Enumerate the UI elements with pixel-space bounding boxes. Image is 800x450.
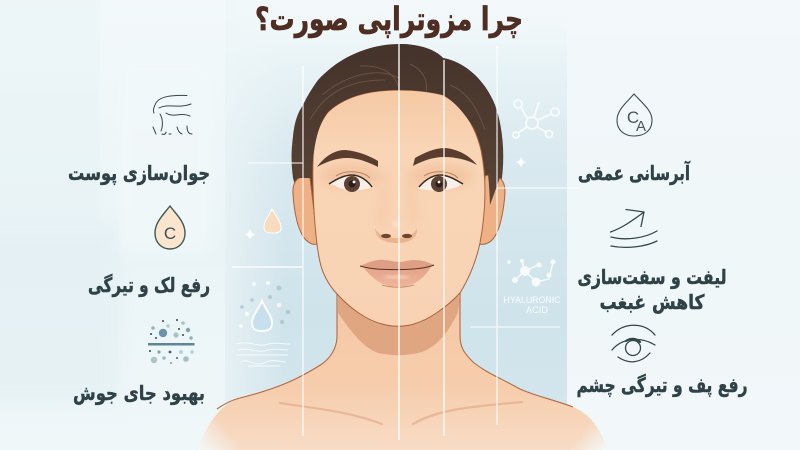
eye socket shading	[320, 164, 472, 225]
wavy lines	[236, 343, 290, 366]
item: lifting and firming	[578, 210, 726, 314]
label: آبرسانی عمقی	[578, 160, 691, 185]
label: جوان‌سازی پوست	[68, 161, 210, 186]
hyaluronic acid text	[504, 295, 561, 316]
shoulder fades	[198, 398, 240, 450]
molecule top	[513, 100, 559, 138]
label line 1: لیفت و سفت‌سازی	[578, 265, 726, 289]
figure: shoulders and neck	[198, 293, 608, 450]
hyaluronic acid text: HYALURONIC	[504, 295, 561, 306]
item: spots and darkness	[88, 206, 210, 297]
icon: eye	[612, 325, 655, 362]
icon: CA drop: A	[636, 118, 646, 135]
label: رفع پف و تیرگی چشم	[576, 373, 748, 398]
right eye	[418, 172, 463, 192]
figure: back hair	[292, 44, 503, 240]
figure: ears	[293, 175, 505, 244]
figure: face	[313, 90, 485, 326]
lips	[360, 260, 434, 287]
left eye	[329, 172, 372, 192]
label line 2: کاهش غبغب	[600, 290, 705, 314]
icon: vitamin C drop: C	[164, 224, 176, 243]
icon: wrinkles	[153, 95, 192, 134]
item: skin rejuvenation	[68, 95, 210, 186]
blue drop	[252, 301, 272, 331]
dots	[239, 281, 281, 328]
nose	[375, 220, 417, 243]
right eyebrow	[413, 148, 477, 166]
hyaluronic acid molecule	[507, 259, 556, 286]
item: acne scars	[73, 319, 205, 405]
icon: lift arrow	[610, 210, 657, 247]
neck shadow	[338, 296, 460, 355]
sparkle	[516, 157, 526, 167]
left eyebrow	[317, 150, 378, 167]
icon: CA drop	[617, 94, 652, 136]
overlay guide lines	[232, 44, 580, 440]
sparkle	[245, 229, 255, 239]
decoration: right molecules panel	[504, 100, 561, 316]
figure: front hair	[293, 44, 502, 205]
icon: CA drop: C	[627, 108, 639, 127]
item: eye puffiness	[576, 325, 748, 398]
label: بهبود جای جوش	[73, 381, 205, 405]
label: رفع لک و تیرگی	[88, 273, 210, 297]
decoration: left droplets panel	[236, 209, 290, 366]
item: deep hydration	[578, 94, 691, 185]
icon: particles over skin line	[148, 319, 194, 364]
title: چرا مزوتراپی صورت؟	[255, 0, 523, 38]
peach drop	[264, 209, 281, 233]
hyaluronic acid text: ACID	[526, 305, 548, 316]
collarbones	[280, 402, 522, 424]
